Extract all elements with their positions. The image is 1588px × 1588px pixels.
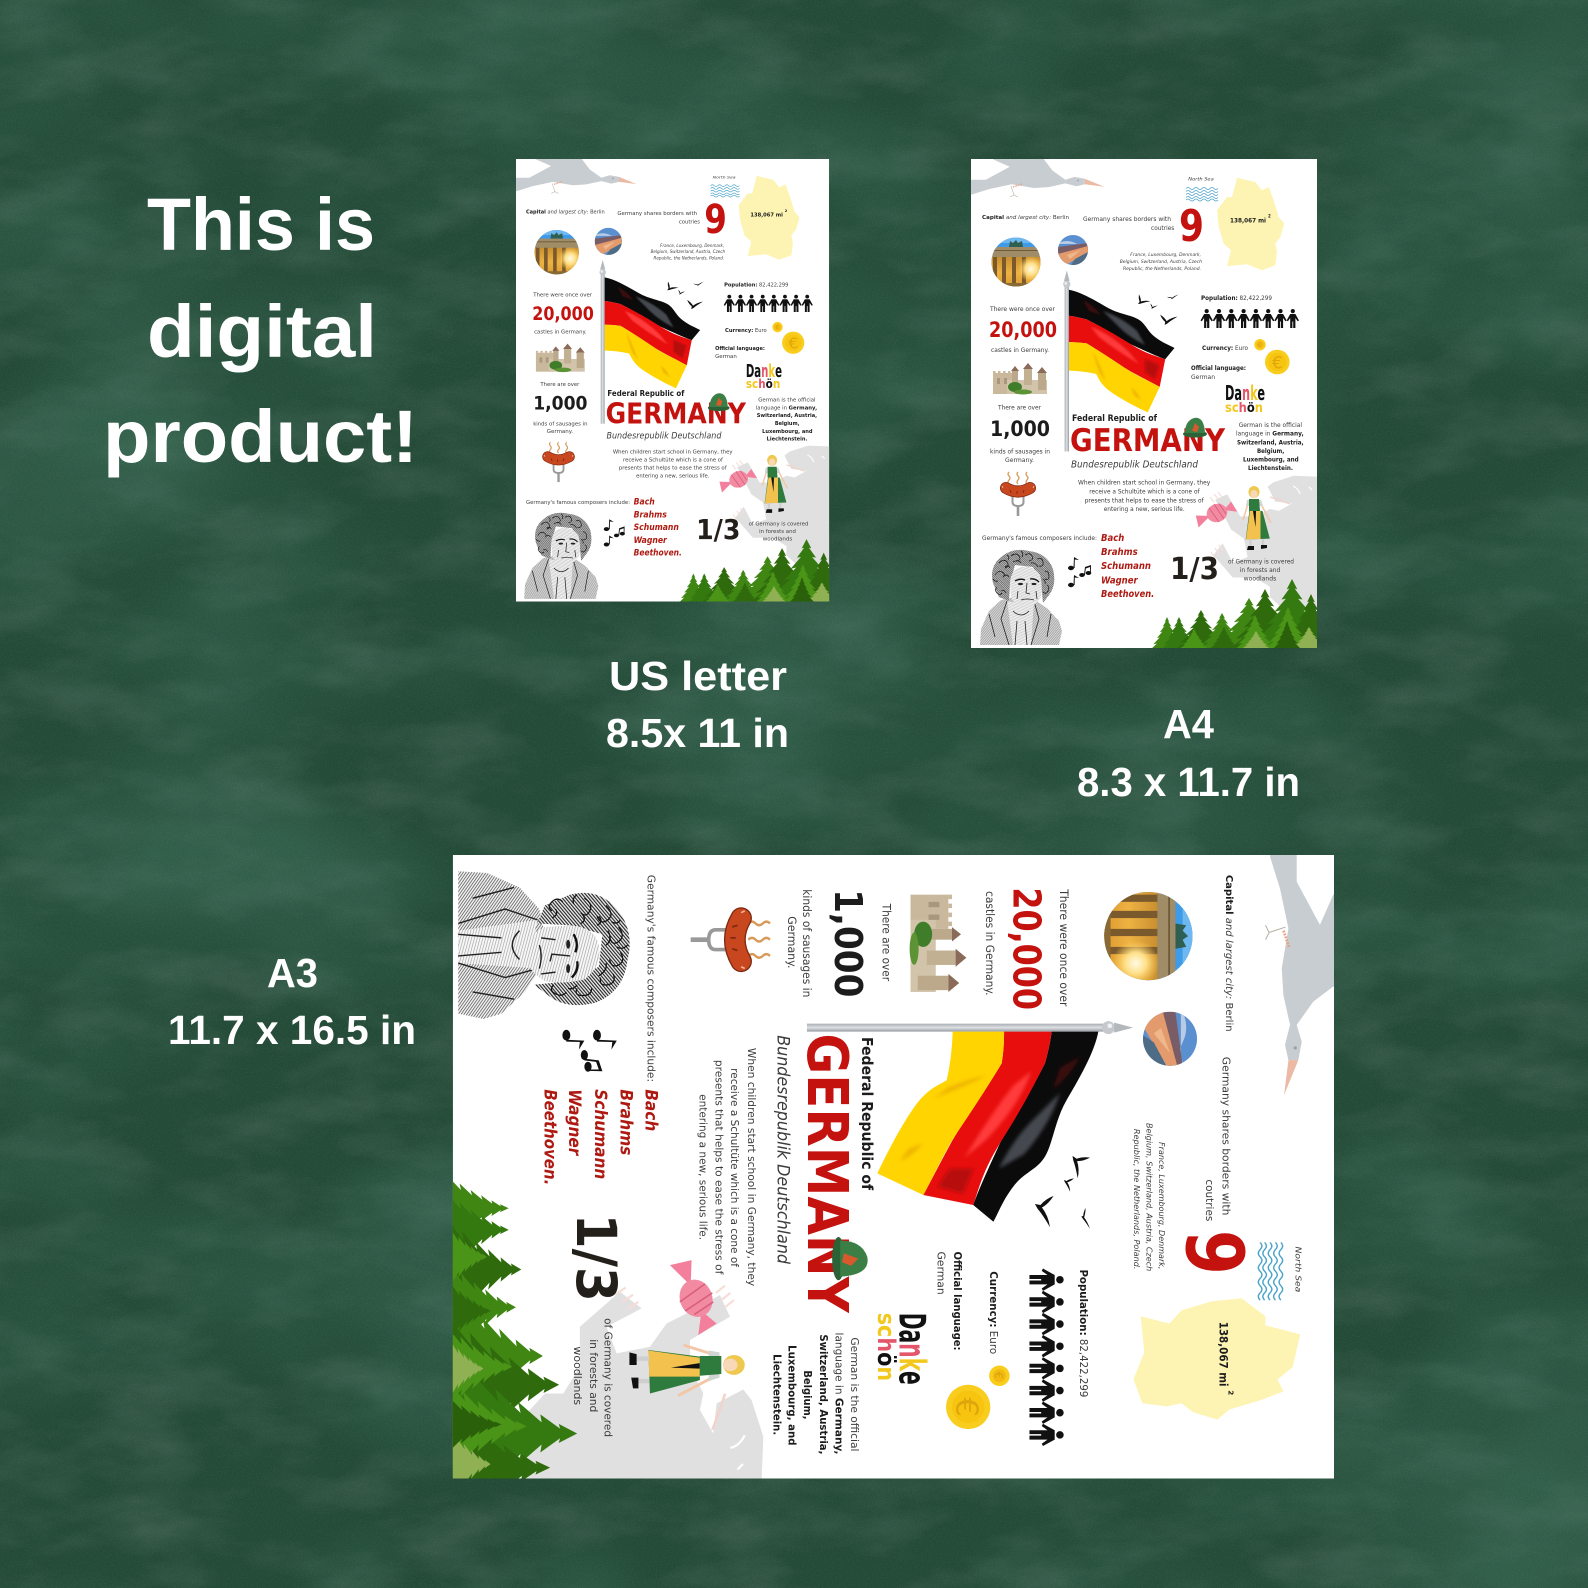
forest fact: in forests and [759,529,796,535]
illustration: bear [1210,476,1317,608]
icon: green hat [708,393,730,411]
castles fact: castles in Germany. [983,891,996,996]
official language note: Liechtenstein. [1248,465,1293,472]
Danke schön lettering [872,1313,932,1385]
composer names: Beethoven. [1101,589,1154,600]
neighbouring countries list: France, Luxembourg, Denmark, [1157,1142,1167,1269]
title block: GERMANY [606,397,746,430]
forest fact [1228,559,1294,583]
sausages fact [533,382,588,435]
official language note: language in Germany, [832,1333,845,1455]
icon: North Sea waves [711,185,740,197]
composer names: Schumann [590,1089,610,1179]
official language note: Liechtenstein. [771,1354,784,1435]
icon: sausage [1002,472,1034,516]
icon: coins [772,322,804,354]
composer names: Beethoven. [634,548,682,558]
official language note: Switzerland, Austria, [1237,439,1304,446]
illustration: girl in dirndl [1243,486,1271,550]
Danke schön lettering [746,361,782,391]
icon: population figures [724,295,813,312]
portrait: Beethoven [980,550,1062,645]
title block [773,1033,876,1313]
icon: music notes [562,1030,617,1072]
borders text: Germany shares borders with [1083,217,1171,223]
composers intro: Germany's famous composers include: [982,536,1097,542]
composer names: Wagner [1101,576,1139,586]
forest fact: woodlands [571,1346,584,1406]
map of Germany [1217,178,1284,270]
icon: sausage [544,442,573,482]
euro signs: € [776,325,780,331]
composer names: Wagner [564,1089,584,1157]
photo: Brandenburg Gate [991,237,1044,289]
borders text [617,211,700,225]
castles fact [989,306,1057,354]
icon: North Sea waves [1258,1242,1283,1300]
forest fact: woodlands [763,537,792,543]
official language note [771,1333,861,1455]
neighbouring countries list [1132,1123,1167,1271]
Schultüte paragraph [613,449,733,480]
German flag [605,277,700,388]
photo: city view [1058,235,1088,265]
illustration: forest [446,1176,577,1525]
population text: Population: 82,422,299 [1077,1269,1090,1398]
official language note: German is the official [1239,422,1302,429]
neighbouring countries list: Belgium, Switzerland, Austria, Czech [1120,259,1202,265]
composers intro: Germany's famous composers include: [644,875,656,1082]
Schultüte paragraph: receive a Schultüte which is a cone of [1089,488,1200,496]
official language note: Switzerland, Austria, [817,1334,830,1455]
title block: GERMANY [1070,423,1225,459]
caption: US letter size: 8.5x 11 in [606,710,789,756]
title block: Federal Republic of [858,1037,876,1190]
neighbouring countries list: France, Luxembourg, Denmark, [1130,252,1201,258]
official language text: Official language: [1191,365,1246,372]
Danke schön lettering: Danke [891,1313,932,1385]
composer names: Brahms [1101,547,1138,558]
sausages fact: Germany. [1005,457,1034,464]
illustration: bear [732,446,829,565]
title block [1070,414,1225,471]
icon: candy [719,468,757,492]
area label: 138,067 mi [750,212,783,218]
currency text: Currency: Euro [1202,345,1248,352]
official language note: Luxembourg, and [1243,457,1299,464]
title block: Federal Republic of [607,389,685,398]
Schultüte paragraph: entering a new, serious life. [697,1094,710,1240]
forest fraction: 1/3 [564,1214,628,1302]
borders text: coutries [1203,1179,1215,1221]
title block: Bundesrepublik Deutschland [773,1035,793,1264]
area label [1230,214,1271,224]
icon: green hat [1183,418,1207,438]
sausages fact: 1,000 [533,393,587,415]
sausages fact: kinds of sausages in [990,449,1050,456]
flagpole [1063,270,1070,452]
sausages fact [785,889,892,997]
sausages fact: kinds of sausages in [533,422,588,428]
icon: coins [1254,339,1290,374]
icon: stork [516,159,637,193]
sausages fact [990,405,1050,464]
borders text: Germany shares borders with [617,211,697,217]
sausages fact: Germany. [547,429,573,435]
area label: 138,067 mi [1217,1322,1230,1387]
castles fact: 20,000 [532,303,594,325]
area label [1217,1322,1236,1395]
composer names: Schumann [634,523,679,533]
castles fact: castles in Germany. [991,347,1049,354]
illustration: girl in dirndl [762,455,788,513]
caption: A3 size: 11.7 x 16.5 in [168,1007,416,1053]
Danke schön lettering: schön [872,1313,901,1381]
portrait: Beethoven [458,871,630,1019]
icon: birds [667,282,704,310]
castles fact: castles in Germany. [534,330,587,336]
borders text [1203,1057,1231,1221]
photo: Brandenburg Gate [1100,891,1193,987]
number 9: 9 [704,197,727,243]
official language note: Liechtenstein. [767,436,807,442]
official language note: German is the official [848,1337,861,1451]
illustration: forest [1149,579,1343,652]
area label: 138,067 mi [1230,218,1266,224]
official language note: language in Germany, [1236,431,1304,438]
icon: North Sea waves [1186,188,1218,201]
official language note: Belgium, [801,1370,814,1420]
castles fact: 20,000 [1004,887,1048,1010]
official language note: Belgium, [1257,448,1284,455]
euro signs [948,1372,1005,1417]
composer names [540,1089,661,1185]
icon: music notes [1068,557,1091,587]
Schultüte paragraph: presents that helps to ease the stress of [1085,497,1205,504]
icon: birds [1031,1149,1091,1230]
forest fact: in forests and [1240,567,1280,574]
icon: candy [1196,501,1237,528]
title block: Federal Republic of [1072,414,1157,424]
official language text [1191,365,1246,381]
composer names: Wagner [634,536,668,546]
neighbouring countries list: Republic, the Netherlands, Poland. [1123,266,1201,272]
official language text: German [715,354,737,360]
heading: This is digital product [103,183,418,478]
official language text: German [1191,374,1215,381]
heading: This is digital product: product! [103,395,418,478]
icon: castle [536,344,585,372]
panel: A3 poster rotated [446,855,1334,1525]
castles fact [532,293,594,336]
flagpole [807,1021,1133,1034]
Schultüte paragraph: receive a Schultüte which is a cone of [728,1068,741,1267]
composer names: Brahms [634,510,667,520]
Schultüte paragraph: entering a new, serious life. [636,474,710,480]
euro signs: € [1258,342,1262,349]
caption: A4 size [1077,701,1300,805]
title block [606,389,746,441]
currency text: Currency: Euro [725,328,767,334]
Schultüte paragraph: entering a new, serious life. [1104,506,1185,513]
icon: coins [946,1366,1010,1429]
euro signs: € [992,1372,1005,1379]
capital text: Capital and largest city: Berlin [982,215,1069,221]
neighbouring countries list [651,243,725,260]
area label [750,209,788,218]
German flag [877,1032,1098,1222]
icon: stork [971,159,1104,197]
forest fraction: 1/3 [696,513,740,546]
composer names: Bach [634,498,655,508]
photo: Brandenburg Gate [534,230,579,274]
official language text: Official language: [951,1251,964,1351]
map of Germany [1133,1298,1300,1420]
caption: US letter size [606,653,789,756]
population text: Population: 82,422,299 [724,283,789,289]
euro signs [776,325,798,353]
North Sea label: North Sea [1293,1247,1302,1293]
forest fact: of Germany is covered [749,521,808,527]
illustration: forest [680,539,830,602]
icon: population figures [1200,309,1299,328]
borders text: Germany shares borders with [1219,1057,1231,1215]
area label: 2 [1268,214,1271,218]
heading: This is digital product: digital [147,290,377,373]
official language note: Luxembourg, and [786,1345,799,1446]
Schultüte paragraph: When children start school in Germany, they [1078,479,1211,486]
forest fact [571,1318,615,1437]
neighbouring countries list [1120,252,1202,272]
forest fact [749,521,808,543]
composer names: Bach [641,1089,661,1131]
caption: A4 size: A4 [1163,701,1214,747]
sausages fact: Germany. [785,916,798,969]
official language text: Official language: [715,346,765,352]
forest fact: of Germany is covered [1228,559,1294,566]
official language note [1236,422,1304,472]
official language note: Luxembourg, and [762,429,813,435]
North Sea label: North Sea [1188,176,1214,182]
euro signs: € [948,1397,983,1417]
Schultüte paragraph [1078,479,1211,513]
panel: US letter poster [516,159,853,605]
official language text: German [935,1251,948,1295]
borders text [1083,217,1174,232]
portrait: Beethoven [524,513,598,599]
caption: A3 size: A3 [267,950,318,996]
icon: candy [670,1260,718,1335]
icon: castle [910,895,966,992]
number 9: 9 [1167,1230,1260,1275]
Danke schön lettering: schön [746,377,780,391]
Danke schön lettering [1225,381,1265,416]
Schultüte paragraph: When children start school in Germany, they [613,449,733,455]
photo: city view [1143,1012,1197,1066]
caption: A4 size: 8.3 x 11.7 in [1077,759,1300,805]
German flag [1069,290,1174,412]
capital text: Capital and largest city: Berlin [526,209,605,215]
currency text: Currency: Euro [987,1271,1000,1355]
composer names [1101,533,1154,600]
sausages fact: There are over [997,405,1041,412]
heading: This is digital product: This is [147,183,375,266]
Danke schön lettering: schön [1225,400,1263,416]
sausages fact: kinds of sausages in [800,889,813,997]
icon: birds [1134,294,1179,327]
capital text: Capital and largest city: Berlin [1223,875,1234,1032]
castles fact: 20,000 [989,318,1057,342]
flagpole [599,260,606,424]
photo: city view [595,228,622,255]
Schultüte paragraph [697,1048,758,1287]
castles fact: There were once over [1057,888,1070,1007]
area label: 2 [1227,1390,1236,1395]
official language note: Switzerland, Austria, [757,413,817,419]
official language note [756,398,817,442]
area label: 2 [785,209,788,213]
neighbouring countries list: Republic, the Netherlands, Poland. [654,255,724,260]
icon: green hat [832,1237,868,1280]
icon: music notes [604,519,625,547]
Schultüte paragraph: presents that helps to ease the stress of [712,1060,725,1275]
Danke schön lettering: Danke [746,361,782,382]
euro signs: € [1272,354,1283,374]
official language text [935,1251,964,1351]
borders text: coutries [679,219,700,225]
official language note: Belgium, [775,421,800,427]
composers intro: Germany's famous composers include: [526,500,630,506]
sausages fact: 1,000 [826,889,870,997]
castles fact: There were once over [989,306,1055,313]
number 9: 9 [1179,201,1204,252]
neighbouring countries list: Belgium, Switzerland, Austria, Czech [651,249,725,254]
neighbouring countries list: Belgium, Switzerland, Austria, Czech [1145,1123,1155,1271]
forest fact: of Germany is covered [602,1318,615,1437]
icon: population figures [1029,1269,1064,1446]
forest fact: woodlands [1244,576,1276,583]
official language note: German is the official [758,398,816,404]
castles fact [983,887,1070,1010]
composer names: Brahms [615,1089,635,1155]
official language note: language in Germany, [756,405,817,411]
castles fact: There were once over [532,293,593,299]
composer names: Beethoven. [540,1089,560,1185]
sausages fact: There are over [879,903,892,982]
composer names: Schumann [1101,561,1151,572]
map of Germany [739,176,800,260]
Schultüte paragraph: When children start school in Germany, they [745,1048,758,1287]
neighbouring countries list: Republic, the Netherlands, Poland. [1132,1129,1142,1269]
neighbouring countries list: France, Luxembourg, Denmark, [660,243,724,248]
icon: castle [993,363,1047,394]
population text: Population: 82,422,299 [1201,295,1272,302]
illustration: bear [525,1286,763,1479]
title block: GERMANY [794,1033,859,1313]
composer names: Bach [1101,533,1125,544]
euro signs [1258,342,1283,374]
official language text [715,346,765,360]
euro signs: € [788,335,798,353]
North Sea label: North Sea [713,174,736,179]
caption: US letter size: US letter [609,653,787,699]
caption: A3 size [168,950,416,1053]
forest fraction: 1/3 [1170,552,1219,587]
composer names [634,498,682,558]
title block: Bundesrepublik Deutschland [607,431,722,441]
sausages fact: There are over [539,382,580,388]
icon: stork [1266,855,1334,1095]
Schultüte paragraph: receive a Schultüte which is a cone of [623,458,724,464]
Danke schön lettering: Danke [1225,381,1265,405]
Schultüte paragraph: presents that helps to ease the stress of [619,466,728,472]
title block: Bundesrepublik Deutschland [1071,460,1199,471]
sausages fact: 1,000 [990,417,1050,441]
forest fact: in forests and [587,1339,600,1412]
borders text: coutries [1151,226,1174,232]
icon: sausage [691,911,770,969]
illustration: girl in dirndl [629,1345,745,1396]
panel: A4 poster [971,159,1343,652]
